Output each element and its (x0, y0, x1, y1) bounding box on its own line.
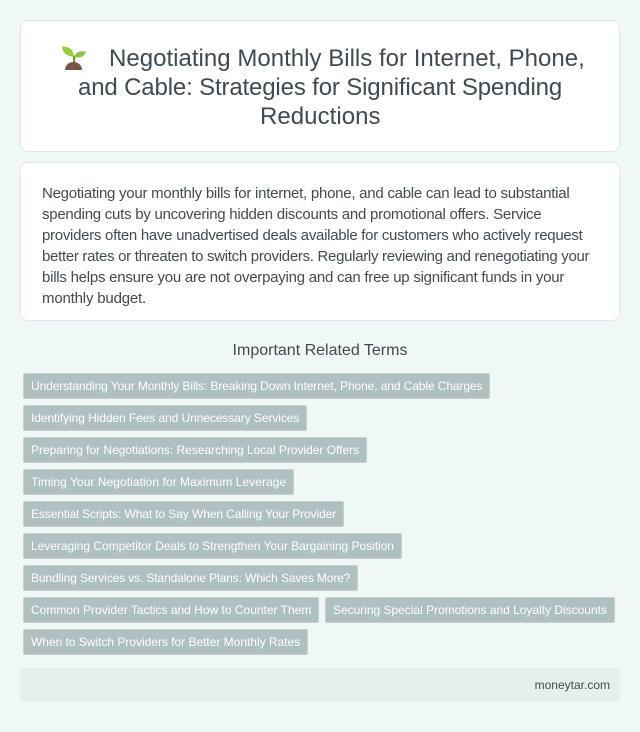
tag: Identifying Hidden Fees and Unnecessary Services (31, 411, 299, 425)
tag: Essential Scripts: What to Say When Calling Your Provider (31, 507, 336, 521)
tag (23, 629, 308, 655)
panel: summary text: Negotiating your monthly bills for internet, phone, and cable can lead to substantial (42, 185, 569, 202)
footer bar (20, 668, 620, 702)
panel: summary text: bills helps ensure you are not overpaying and can free up significant funds in your (42, 269, 564, 286)
tag (325, 597, 615, 623)
tag (23, 469, 294, 495)
footer source: moneytar.com (535, 678, 610, 692)
tag (23, 533, 402, 559)
title: Negotiating Monthly Bills for Internet, Phone, (109, 45, 585, 72)
tag list (23, 373, 615, 655)
tag: Securing Special Promotions and Loyalty Discounts (333, 603, 607, 617)
panel: title card: Reductions (260, 103, 381, 130)
panel: summary text: monthly budget. (42, 290, 146, 307)
heading: related terms: Important Related Terms (233, 342, 407, 359)
panel: summary text: spending cuts by uncovering hidden discounts and promotional offers. Service (42, 206, 541, 223)
tag (23, 437, 367, 463)
icon: seedling (62, 46, 86, 70)
tag: Common Provider Tactics and How to Counter Them (31, 603, 311, 617)
panel: summary text (20, 162, 620, 321)
tag: Leveraging Competitor Deals to Strengthen Your Bargaining Position (31, 539, 394, 553)
tag: Preparing for Negotiations: Researching Local Provider Offers (31, 443, 359, 457)
tag (23, 501, 344, 527)
tag (23, 405, 307, 431)
tag (23, 597, 319, 623)
panel: title card (20, 20, 620, 152)
panel: summary text: providers often have unadvertised deals available for customers who actively request (42, 227, 583, 244)
tag: Bundling Services vs. Standalone Plans: Which Saves More? (31, 571, 350, 585)
panel: title card: and Cable: Strategies for Significant Spending (78, 74, 562, 101)
tag: Timing Your Negotiation for Maximum Leverage (31, 475, 286, 489)
tag: Understanding Your Monthly Bills: Breaking Down Internet, Phone, and Cable Charges (31, 379, 482, 393)
tag: When to Switch Providers for Better Monthly Rates (31, 635, 300, 649)
panel: summary text: better rates or threaten to switch providers. Regularly reviewing and renegotiating your (42, 248, 589, 265)
tag (23, 565, 358, 591)
tag (23, 373, 490, 399)
